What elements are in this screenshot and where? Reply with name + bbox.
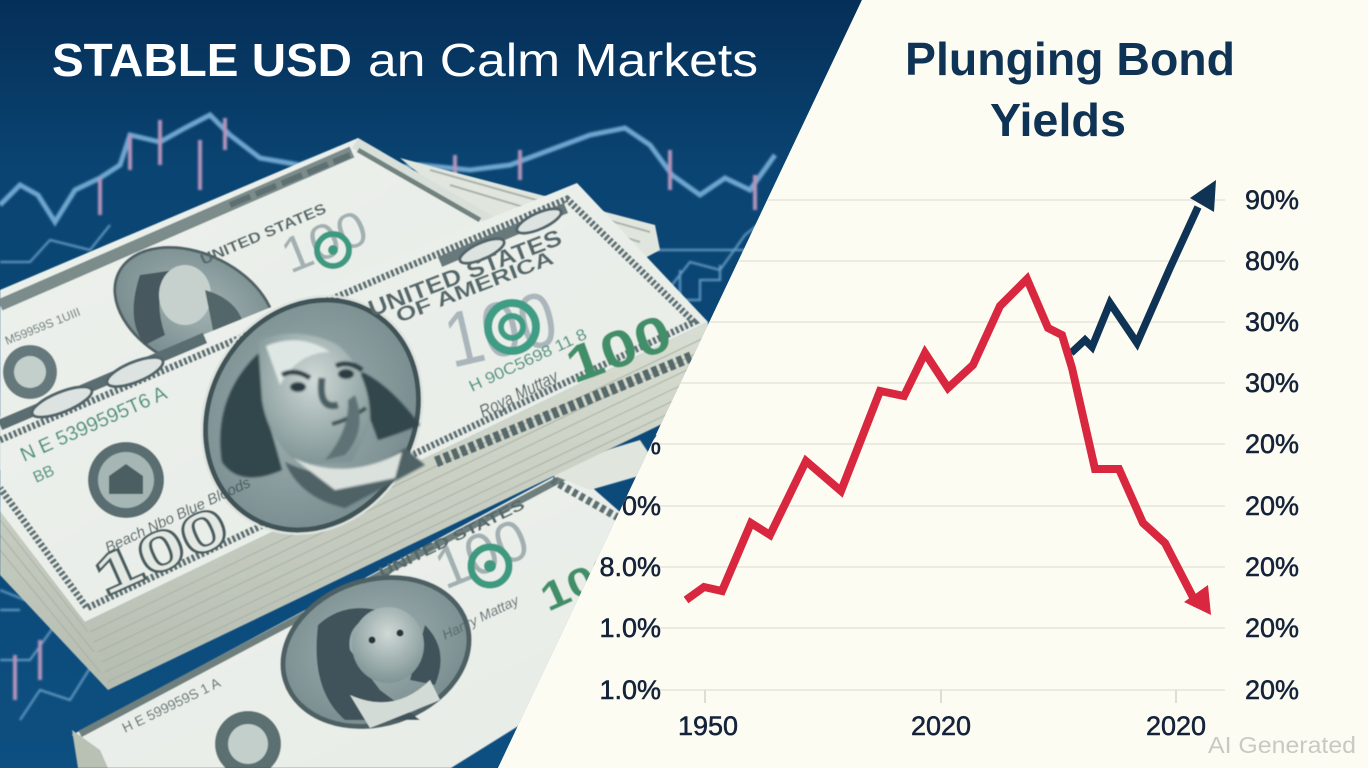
green 100: 100 bbox=[558, 304, 680, 395]
stack edge bbox=[0, 322, 712, 690]
x axis labels: 2020 bbox=[1146, 711, 1206, 741]
big numeral with green seal bbox=[448, 293, 555, 368]
right axis labels: 20% bbox=[1245, 613, 1299, 643]
serial left: N E 5399595T6 A bbox=[17, 382, 171, 467]
treasury seal bbox=[88, 442, 164, 518]
left heading bbox=[52, 34, 758, 86]
district code: BB bbox=[31, 462, 57, 487]
bottom bill seal bbox=[215, 711, 281, 768]
right axis labels: 30% bbox=[1245, 307, 1299, 337]
rear bill portrait bbox=[112, 245, 272, 354]
right axis labels: 30% bbox=[1245, 368, 1299, 398]
left heading: an Calm Markets bbox=[368, 34, 758, 86]
panel: bond yields chart side bbox=[498, 0, 1368, 768]
left heading: STABLE USD bbox=[52, 34, 352, 86]
serial numbers: H 90C5698 11 8 bbox=[467, 326, 590, 396]
lower signature: Beach Nbo Blue Bloods bbox=[103, 474, 254, 557]
bill face bbox=[0, 183, 708, 622]
left axis labels: 8.0% bbox=[599, 552, 661, 582]
right axis labels: 80% bbox=[1245, 246, 1299, 276]
right axis labels: 20% bbox=[1245, 675, 1299, 705]
right axis labels bbox=[1245, 185, 1299, 705]
x axis labels: 1950 bbox=[678, 711, 738, 741]
right axis labels: 20% bbox=[1245, 429, 1299, 459]
bill: bottom stack: H E 599959S 1 A bbox=[119, 674, 223, 736]
left axis labels bbox=[599, 430, 661, 705]
bill border bbox=[0, 199, 694, 608]
x axis labels bbox=[678, 711, 1206, 741]
rear bill green 100 bbox=[284, 212, 366, 273]
bill: front stack bbox=[0, 183, 712, 690]
bill lettering: UNITED STATES bbox=[364, 224, 565, 322]
right axis labels: 20% bbox=[1245, 491, 1299, 521]
rear bill seal bbox=[3, 345, 57, 399]
left axis labels: 0% bbox=[622, 491, 661, 521]
right heading: Plunging Bond bbox=[905, 33, 1235, 85]
x axis labels: 2020 bbox=[911, 711, 971, 741]
left axis labels: 1.0% bbox=[599, 613, 661, 643]
big numeral with green seal: 100 bbox=[436, 274, 565, 385]
red falling line bbox=[686, 279, 1211, 615]
bill: rear stack bbox=[0, 138, 660, 470]
right axis labels: 90% bbox=[1245, 185, 1299, 215]
chart gridlines bbox=[640, 200, 1225, 703]
ornament ovals bbox=[29, 204, 564, 423]
signature: Roya Muttay bbox=[476, 366, 562, 422]
bottom bill green 100 bbox=[437, 521, 596, 612]
bottom bill green 100: 100 bbox=[534, 545, 629, 620]
left axis labels: 1.0% bbox=[599, 675, 661, 705]
right heading: Yields bbox=[990, 94, 1126, 146]
bill: rear stack: M59959S 1UIII bbox=[3, 305, 82, 348]
lower-left 100: 100 bbox=[84, 493, 238, 608]
bill: bottom stack: Hanry Mattay bbox=[439, 591, 522, 643]
rear bill lettering: UNITED STATES bbox=[198, 200, 329, 269]
right axis labels: 20% bbox=[1245, 552, 1299, 582]
left axis labels: 0.0% bbox=[599, 430, 661, 460]
watermark: AI Generated bbox=[1208, 732, 1356, 758]
chart: background market lines bbox=[0, 115, 800, 720]
bill portrait: Franklin bbox=[200, 294, 426, 536]
bottom bill lettering: UNITED STATES bbox=[376, 496, 528, 582]
bottom bill portrait bbox=[280, 574, 472, 730]
bottom bill green 100: 100 bbox=[426, 506, 538, 602]
bill: bottom stack bbox=[72, 439, 648, 768]
rear bill green 100: 100 bbox=[273, 199, 376, 284]
navy rising arrow bbox=[1071, 180, 1216, 353]
bill lettering: OF AMERICA bbox=[393, 247, 557, 328]
right heading bbox=[905, 33, 1235, 146]
panel: stable USD photo side bbox=[0, 0, 870, 768]
